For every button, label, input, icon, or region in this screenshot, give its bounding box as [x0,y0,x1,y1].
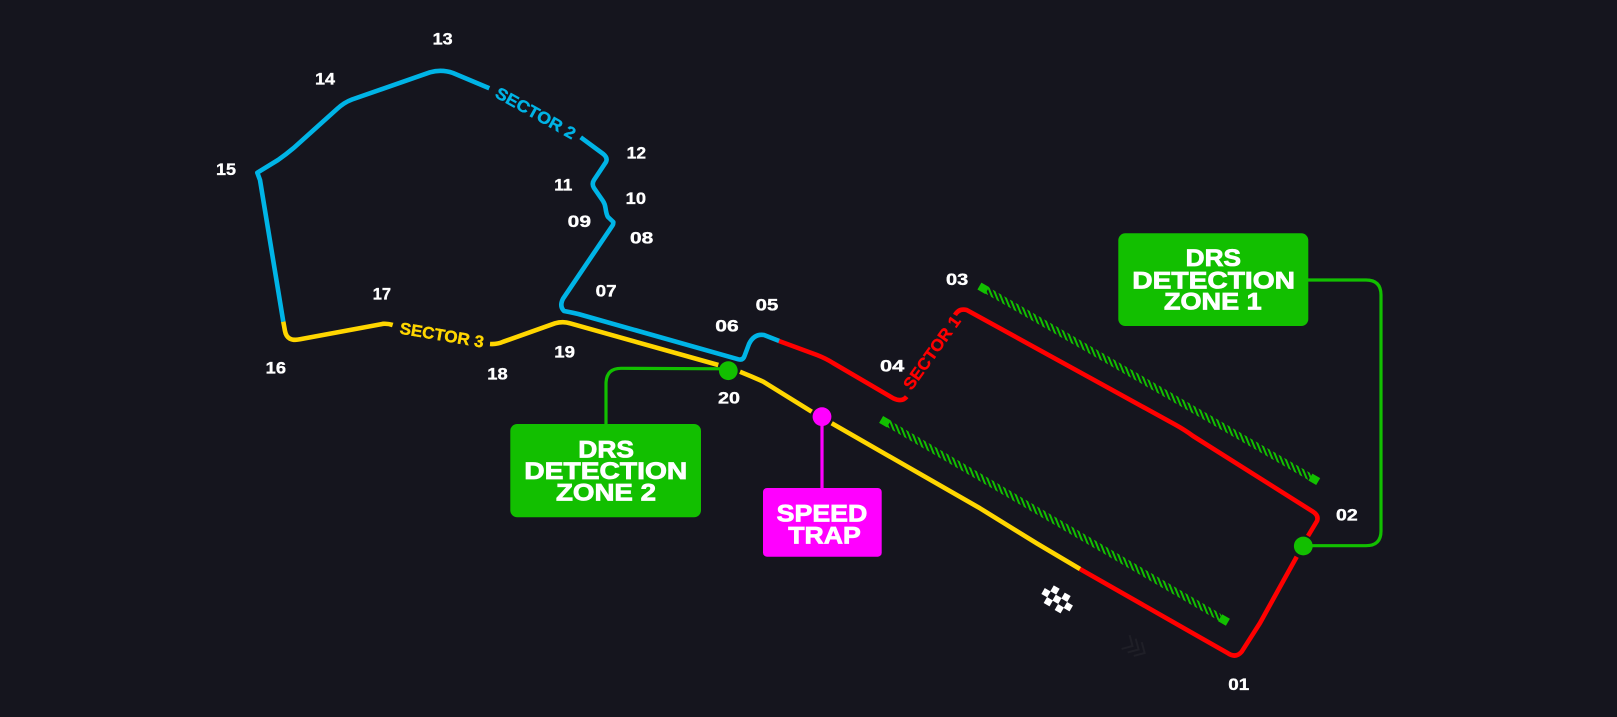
icon: chequered start flag [1041,585,1073,613]
turn numbers: 09 [568,212,591,231]
callout: DRS detection zone 1: DETECTION [1132,267,1295,294]
turn numbers: 02 [1336,506,1358,525]
callout: DRS detection zone 2: DETECTION [524,458,687,485]
callout: DRS detection zone 1: DRS [1186,245,1241,272]
callout: speed trap: TRAP [788,522,861,549]
turn numbers: 11 [554,176,572,195]
turn numbers: 18 [487,364,508,383]
callout: speed trap: SPEED [777,501,867,528]
turn numbers: 14 [315,70,336,89]
track: sector 2 blue, upper part [257,71,489,322]
turn numbers: 10 [626,189,646,208]
turn numbers: 20 [718,388,740,407]
sector 3 label: SECTOR 3 [398,320,485,352]
turn numbers: 17 [373,284,391,303]
track: sector 1 red, main straight [955,310,1318,536]
speed trap point [813,407,831,426]
connector: DRS detection zone 2 [606,368,728,424]
turn numbers: 01 [1228,675,1249,694]
track: sector 1 red, final corner [1080,557,1297,656]
callout: DRS detection zone 2: ZONE 2 [556,480,656,507]
connector: speed trap [820,416,824,488]
DRS detection point at turn 2 [1294,537,1313,555]
DRS zone 1 dashed activation line [977,283,1320,485]
callout: DRS detection zone 1: ZONE 1 [1164,288,1262,315]
turn numbers [216,29,1358,694]
callout: speed trap [763,488,882,557]
DRS zone 2 dashed activation line [879,416,1230,626]
track: sector 3 yellow, lower straight [832,423,1080,569]
turn numbers: 15 [216,160,236,179]
track: sector 1 red, upper part [779,341,907,400]
connector: DRS detection zone 1 [1303,280,1381,546]
turn numbers: 07 [596,282,617,301]
turn numbers: 19 [554,343,575,362]
track: sector 3 yellow, middle [740,372,812,412]
turn numbers: 16 [266,358,286,377]
callout: DRS detection zone 1 [1118,233,1308,326]
DRS detection point at turn 20 [719,361,738,380]
sector 2 label: SECTOR 2 [492,84,579,143]
turn numbers: 08 [630,228,653,247]
track: sector 2 blue, lower part [561,137,779,360]
turn numbers: 03 [946,270,968,289]
turn numbers: 04 [880,357,905,376]
turn numbers: 05 [756,296,778,315]
track: sector 3 yellow, upper [490,322,718,365]
callout: DRS detection zone 2 [510,424,701,517]
icon: faint direction chevrons [1122,635,1149,660]
turn numbers: 12 [627,144,646,163]
sector 1 label: SECTOR 1 [900,313,965,393]
turn numbers: 06 [715,317,739,336]
turn numbers: 13 [433,29,453,48]
track: sector 3 yellow, left [283,322,393,340]
callout: DRS detection zone 2: DRS [578,436,634,463]
